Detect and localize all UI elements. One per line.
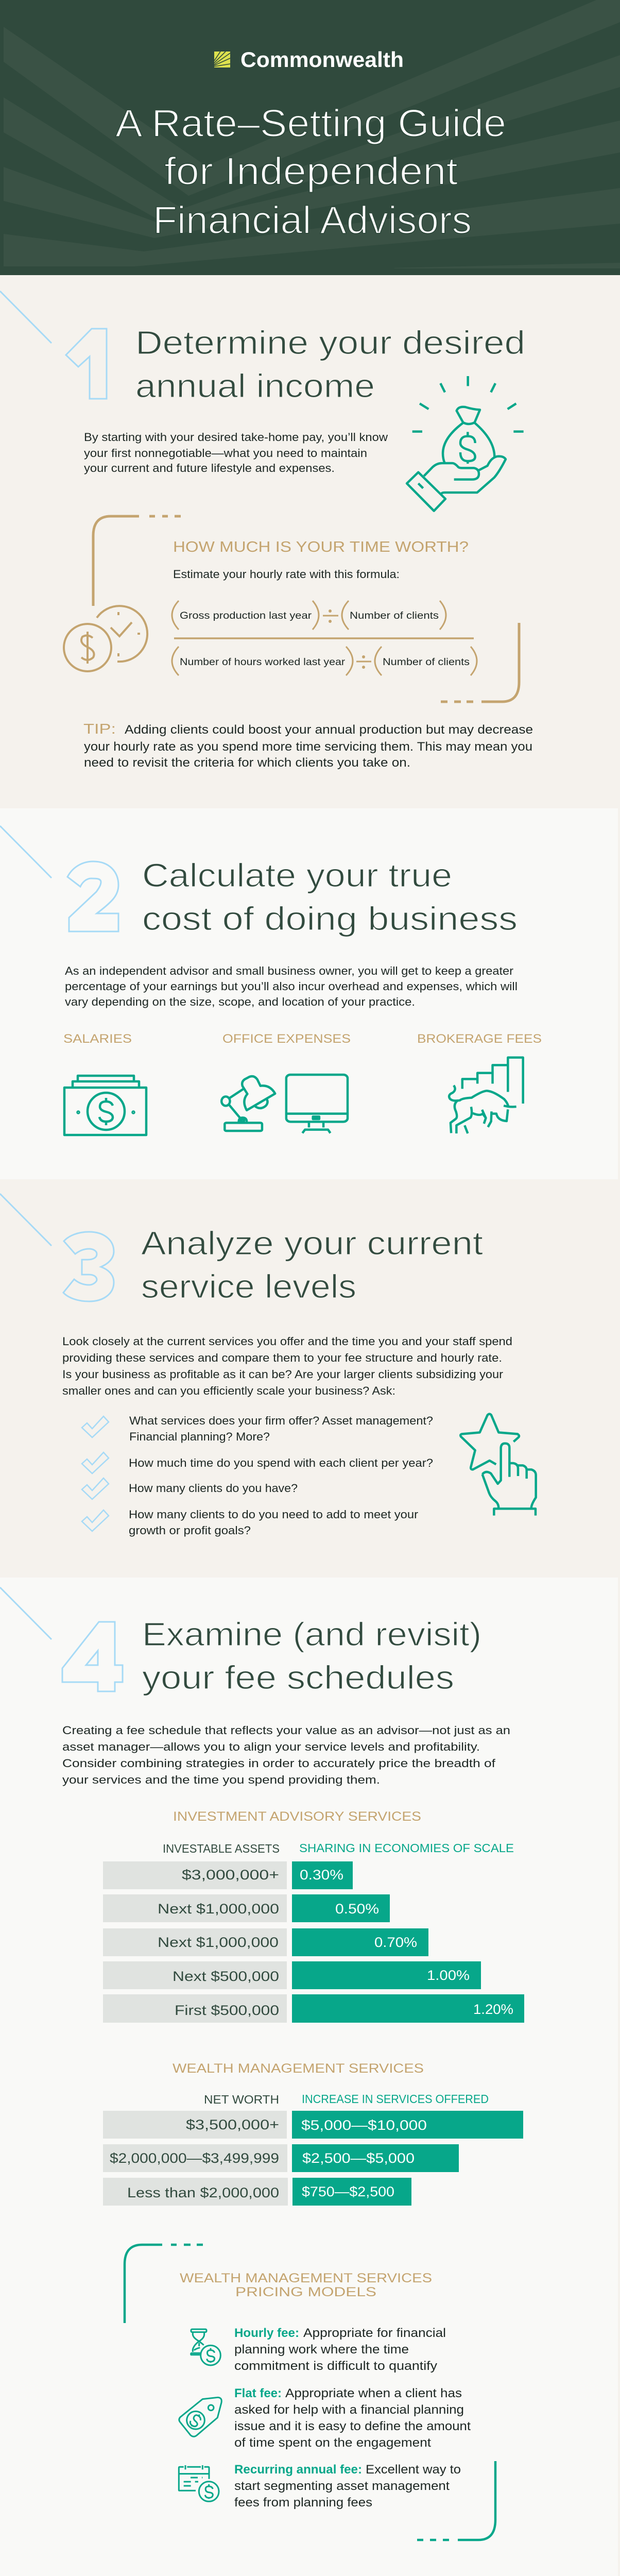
fee values	[300, 1867, 513, 2017]
section 3 heading: service levels	[141, 1268, 356, 1305]
section 4 number	[0, 1587, 123, 1691]
formula	[172, 601, 477, 675]
section 3 text: Look closely at the current services you offer and the time you and your staff spend	[62, 1335, 512, 1348]
section 3 text	[62, 1335, 512, 1397]
flat fee text: Flat fee:	[234, 2386, 282, 2400]
section 1 text: By starting with your desired take-home pay, you’ll know	[84, 431, 388, 444]
section 2 number	[0, 826, 118, 931]
fee ranges: $750—$2,500	[302, 2184, 394, 2199]
recurring annual fee text: Excellent way to	[366, 2463, 461, 2477]
section 1 text	[84, 431, 388, 474]
fee values: 1.00%	[427, 1968, 470, 1983]
gold bracket bottom	[441, 623, 519, 702]
green bracket top	[125, 2245, 203, 2323]
net worth labels	[110, 2117, 279, 2200]
section 3 heading: Analyze your current	[141, 1225, 483, 1262]
callout heading: PRICING MODELS	[235, 2285, 376, 2299]
section 3 heading	[141, 1225, 483, 1305]
fee values: 0.70%	[374, 1935, 417, 1950]
section 1 number	[0, 291, 107, 399]
fee values: 0.50%	[335, 1901, 379, 1917]
callout intro: Estimate your hourly rate with this formula:	[173, 568, 400, 581]
section 4 text: Consider combining strategies in order to accurately price the breadth of	[62, 1757, 496, 1770]
net worth labels: Less than $2,000,000	[127, 2185, 279, 2200]
section 4 text: asset manager—allows you to align your service levels and profitability.	[62, 1740, 480, 1753]
callout heading: WEALTH MANAGEMENT SERVICES	[180, 2271, 432, 2285]
check item 1	[82, 1414, 433, 1443]
check item 2: How much time do you spend with each client per year?	[129, 1456, 433, 1469]
callout: how much is your time worth	[64, 516, 519, 702]
header sunburst rays	[4, 0, 620, 268]
net worth labels: $2,000,000—$3,499,999	[110, 2150, 279, 2166]
hourly fee text: planning work where the time	[234, 2343, 409, 2357]
column headings	[204, 2092, 489, 2106]
cost labels: OFFICE EXPENSES	[222, 1032, 351, 1046]
hourly fee text: Appropriate for financial	[303, 2326, 446, 2340]
bars	[103, 2111, 523, 2206]
flat fee text: of time spent on the engagement	[234, 2436, 431, 2450]
section 2 text: percentage of your earnings but you’ll also incur overhead and expenses, which will	[65, 980, 518, 993]
icon: hourglass and coin	[191, 2329, 220, 2365]
column headings	[163, 1841, 514, 1855]
pricing models callout	[125, 2245, 495, 2540]
recurring annual fee text: Recurring annual fee:	[234, 2463, 362, 2477]
section 4 text: Creating a fee schedule that reflects your value as an advisor—not just as an	[62, 1724, 510, 1737]
check item 1: What services does your firm offer? Asset management?	[129, 1414, 433, 1427]
section 4 heading: your fee schedules	[142, 1659, 454, 1696]
column headings: INCREASE IN SERVICES OFFERED	[302, 2092, 489, 2106]
asset labels	[158, 1867, 279, 2018]
title: Financial Advisors	[153, 198, 472, 242]
fee ranges: $2,500—$5,000	[302, 2150, 415, 2166]
recurring annual fee text: fees from planning fees	[234, 2496, 372, 2510]
formula: Gross production last year	[180, 611, 312, 621]
hourly fee text: Hourly fee:	[234, 2326, 299, 2340]
tip: your hourly rate as you spend more time servicing them. This may mean you	[84, 740, 532, 754]
callout heading: HOW MUCH IS YOUR TIME WORTH?	[173, 539, 469, 555]
recurring annual fee text: start segmenting asset management	[234, 2479, 450, 2493]
section 1 text: your current and future lifestyle and expenses.	[84, 462, 335, 474]
logo: Commonwealth	[240, 47, 404, 72]
asset labels: $3,000,000+	[182, 1867, 279, 1883]
fee ranges: $5,000—$10,000	[301, 2117, 427, 2133]
formula: Number of clients	[350, 611, 439, 621]
chart heading: INVESTMENT ADVISORY SERVICES	[173, 1809, 421, 1824]
section 4 panel	[0, 1578, 620, 2576]
check item 2	[82, 1452, 433, 1473]
section 1 panel	[0, 275, 620, 808]
section 3 number	[0, 1194, 114, 1301]
recurring annual fee text	[234, 2463, 461, 2510]
section 2 heading	[142, 857, 518, 937]
section 2 heading: Calculate your true	[142, 857, 452, 894]
checklist	[82, 1414, 433, 1537]
check item 4: How many clients to do you need to add to meet your	[129, 1508, 418, 1521]
check item 1: Financial planning? More?	[129, 1430, 270, 1443]
section 1 text: your first nonnegotiable—what you need to maintain	[84, 447, 367, 460]
cost labels: BROKERAGE FEES	[417, 1032, 542, 1046]
cost labels	[63, 1032, 542, 1046]
section 1 heading: annual income	[135, 367, 375, 404]
fee values: 0.30%	[300, 1867, 343, 1883]
cost labels: SALARIES	[63, 1032, 132, 1046]
section 3 text: smaller ones and can you efficiently scale your business? Ask:	[62, 1384, 395, 1397]
fee ranges	[301, 2117, 427, 2199]
tip: TIP:	[83, 721, 116, 737]
check item 4	[82, 1508, 418, 1537]
icon: computer monitor	[286, 1075, 348, 1133]
green bracket bottom	[417, 2461, 495, 2540]
icon: desk lamp	[221, 1076, 275, 1131]
formula: Number of clients	[383, 657, 470, 668]
flat fee text: asked for help with a financial planning	[234, 2403, 464, 2417]
icon: hand holding money bag	[407, 376, 524, 511]
section 3 text: providing these services and compare them to your fee structure and hourly rate.	[62, 1351, 502, 1364]
bars	[103, 1861, 524, 2023]
icon: calendar and coin	[179, 2465, 219, 2501]
section 3 panel	[0, 1179, 620, 1578]
hourly fee text: commitment is difficult to quantify	[234, 2359, 437, 2373]
flat fee text	[234, 2386, 471, 2450]
icon: bull and rising steps	[449, 1058, 523, 1133]
title: for Independent	[164, 149, 458, 193]
flat fee text: Appropriate when a client has	[285, 2386, 462, 2400]
header panel	[0, 0, 620, 275]
icon: coin and clock	[64, 606, 147, 671]
column headings: SHARING IN ECONOMIES OF SCALE	[299, 1841, 514, 1855]
section 3 text: Is your business as profitable as it can be? Are your larger clients subsidizing your	[62, 1368, 503, 1381]
section 4 text: your services and the time you spend providing them.	[62, 1773, 380, 1786]
asset labels: Next $1,000,000	[158, 1901, 279, 1917]
icon: cash stack	[64, 1076, 146, 1135]
fee values: 1.20%	[473, 2002, 513, 2017]
tip	[83, 721, 533, 770]
asset labels: First $500,000	[175, 2003, 279, 2018]
flat fee text: issue and it is easy to define the amount	[234, 2419, 471, 2433]
chart heading: WEALTH MANAGEMENT SERVICES	[173, 2061, 424, 2076]
section 2 heading: cost of doing business	[142, 900, 518, 937]
title: A Rate–Setting Guide	[115, 101, 506, 145]
check item 4: growth or profit goals?	[129, 1524, 251, 1537]
section 2 text: As an independent advisor and small business owner, you will get to keep a greater	[65, 964, 513, 977]
column headings: INVESTABLE ASSETS	[163, 1842, 280, 1855]
tip: need to revisit the criteria for which clients you take on.	[84, 756, 410, 770]
check item 3	[82, 1478, 298, 1499]
hourly fee text	[234, 2326, 446, 2373]
section 4 text	[62, 1724, 510, 1786]
investment advisory chart	[103, 1809, 524, 2023]
section 2 text: vary depending on the size, scope, and location of your practice.	[65, 995, 415, 1008]
section 4 heading	[142, 1616, 481, 1696]
asset labels: Next $1,000,000	[158, 1935, 279, 1950]
section 1 heading: Determine your desired	[135, 324, 525, 361]
section 4 heading: Examine (and revisit)	[142, 1616, 481, 1653]
section 2 panel	[0, 808, 620, 1179]
callout heading	[180, 2271, 432, 2299]
icon: hand pointing at star	[460, 1414, 536, 1516]
section 2 text	[65, 964, 518, 1008]
formula: Number of hours worked last year	[180, 657, 346, 668]
check item 3: How many clients do you have?	[129, 1482, 298, 1495]
title	[115, 101, 506, 242]
column headings: NET WORTH	[204, 2093, 279, 2106]
wealth management chart	[103, 2061, 523, 2206]
icon: price tag	[179, 2397, 221, 2436]
tip: Adding clients could boost your annual production but may decrease	[125, 723, 533, 737]
asset labels: Next $500,000	[173, 1969, 279, 1984]
gold bracket top	[93, 516, 181, 606]
net worth labels: $3,500,000+	[186, 2117, 279, 2132]
section 1 heading	[135, 324, 525, 404]
